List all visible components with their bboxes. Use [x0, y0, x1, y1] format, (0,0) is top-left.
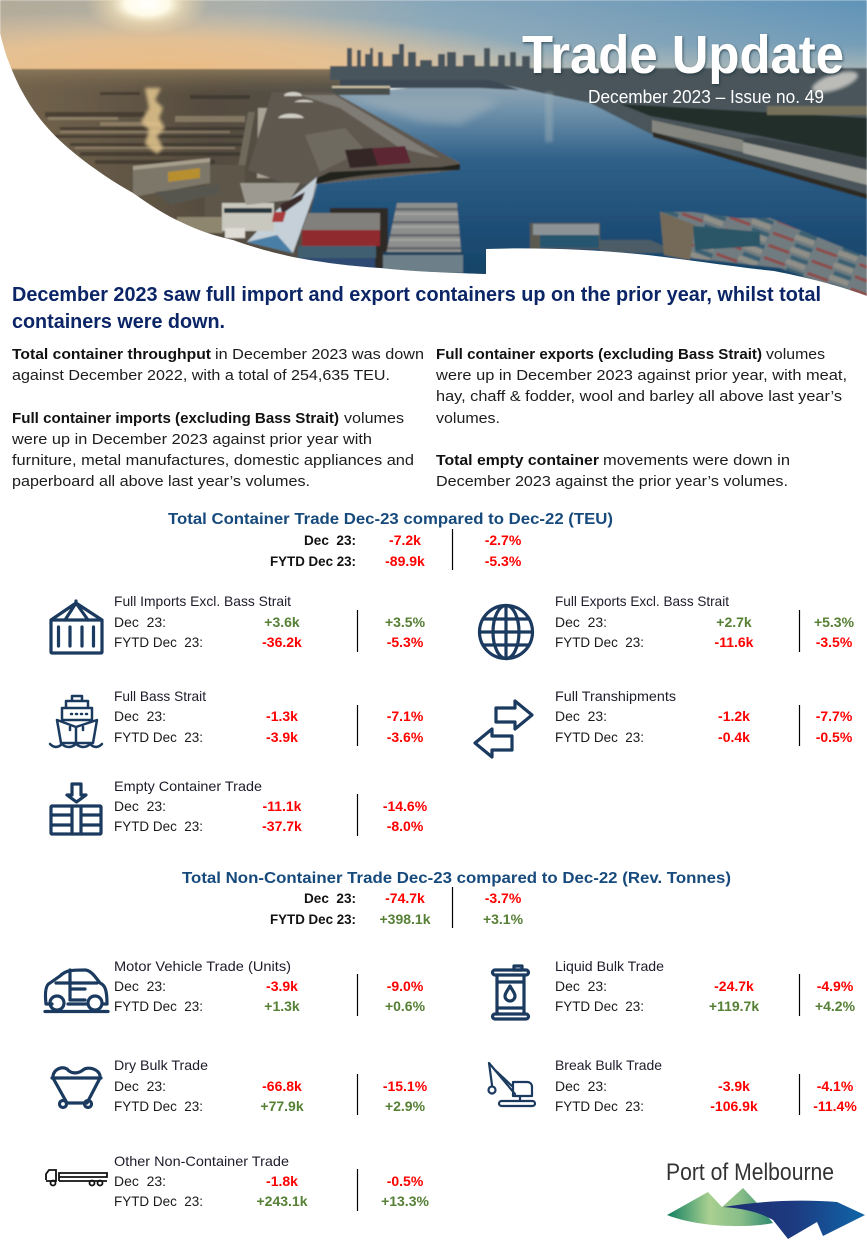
panel: motor vehicle trade: +0.6% [385, 998, 426, 1014]
total non-container trade summary: +398.1k [380, 911, 431, 927]
panel: full imports: Full Imports Excl. Bass Strait [114, 593, 291, 609]
main headline [12, 284, 821, 333]
panel: motor vehicle trade: FYTD Dec 23: [114, 998, 203, 1014]
main headline: containers were down. [12, 311, 225, 333]
section heading: total non-container trade: Total Non-Container Trade Dec-23 compared to Dec-22 (Rev. Tonnes) [182, 870, 731, 887]
panel: full exports: +5.3% [814, 614, 855, 630]
panel: break bulk trade: -3.9k [718, 1078, 750, 1094]
panel: dry bulk trade: Dry Bulk Trade [114, 1057, 208, 1073]
central pier [248, 92, 460, 185]
panel: full imports: FYTD Dec 23: [114, 634, 203, 650]
water [290, 84, 867, 300]
logo: Port of Melbourne [666, 1159, 865, 1239]
panel: motor vehicle trade: -3.9k [266, 978, 298, 994]
main headline: December 2023 saw full import and export containers up on the prior year, whilst total [12, 284, 821, 306]
icon: flatbed truck [46, 1170, 107, 1186]
red container stack [295, 208, 388, 270]
panel: liquid bulk trade: Liquid Bulk Trade [555, 958, 664, 974]
icon: two-way arrows [475, 701, 532, 757]
right container stacks [660, 212, 867, 300]
total container trade summary: Dec 23: [304, 533, 356, 548]
right bank [440, 67, 867, 200]
paragraph: full exports: volumes [766, 346, 825, 363]
panel: full Bass Strait: -1.3k [266, 708, 298, 724]
panel: dry bulk trade: +77.9k [260, 1098, 304, 1114]
icon: globe [480, 606, 532, 658]
panel: full imports: Dec 23: [114, 614, 166, 630]
panel: motor vehicle trade: Dec 23: [114, 978, 166, 994]
panel: full transhipments: -0.4k [718, 729, 750, 745]
panel: full Bass Strait: Dec 23: [114, 708, 166, 724]
paragraph: empty containers: Total empty container [436, 452, 599, 469]
paragraph: total throughput: in December 2023 was down [215, 346, 424, 363]
paragraph: full imports: were up in December 2023 against prior year with [11, 431, 372, 448]
paragraph: full exports: volumes. [436, 410, 500, 427]
panel: break bulk trade: -106.9k [710, 1098, 758, 1114]
panel: full transhipments: -7.7% [816, 708, 853, 724]
panel: dry bulk trade: Dec 23: [114, 1078, 166, 1094]
panel: full transhipments: -0.5% [816, 729, 853, 745]
sky [0, 0, 867, 70]
panel: empty container trade: -14.6% [383, 798, 428, 814]
panel: motor vehicle trade: Motor Vehicle Trade (Units) [114, 958, 291, 974]
total non-container trade summary: FYTD Dec 23: [270, 912, 356, 927]
panel: other non-container trade: +243.1k [256, 1193, 308, 1209]
panel: liquid bulk trade: FYTD Dec 23: [555, 998, 644, 1014]
panel: full exports: Full Exports Excl. Bass Strait [555, 593, 729, 609]
panel: empty container trade: -8.0% [387, 818, 424, 834]
total container trade summary: -2.7% [485, 532, 522, 548]
total container trade summary [270, 529, 522, 570]
total non-container trade summary: -74.7k [385, 890, 425, 906]
logo: Port of Melbourne: Port of Melbourne [666, 1159, 834, 1186]
total non-container trade summary: +3.1% [483, 911, 524, 927]
paragraph: full imports: Full container imports (excluding Bass Strait) [12, 410, 339, 427]
paragraph: empty containers: December 2023 against the prior year’s volumes. [436, 473, 788, 490]
panel: other non-container trade: Dec 23: [114, 1173, 166, 1189]
paragraph: full imports: volumes [344, 410, 404, 427]
total container trade summary: -7.2k [389, 532, 421, 548]
panel: full exports: +2.7k [716, 614, 752, 630]
panel: other non-container trade: +13.3% [381, 1193, 429, 1209]
panel: full Bass Strait: Full Bass Strait [114, 688, 206, 704]
panel: full exports: -3.5% [816, 634, 853, 650]
panel: full transhipments: FYTD Dec 23: [555, 729, 644, 745]
panel: full Bass Strait: -3.6% [387, 729, 424, 745]
panel: break bulk trade: Dec 23: [555, 1078, 607, 1094]
panel: full imports: -36.2k [262, 634, 302, 650]
total non-container trade summary: -3.7% [485, 890, 522, 906]
panel: full imports: -5.3% [387, 634, 424, 650]
panel: liquid bulk trade [492, 958, 856, 1019]
paragraph: full imports: furniture, metal manufactures, domestic appliances and [12, 452, 414, 469]
panel: break bulk trade: -11.4% [813, 1098, 857, 1114]
panel: break bulk trade [488, 1057, 857, 1115]
panel: full exports: FYTD Dec 23: [555, 634, 644, 650]
total container trade summary: FYTD Dec 23: [270, 554, 356, 569]
paragraph: full exports: were up in December 2023 against prior year, with meat, [435, 367, 847, 384]
panel: full transhipments [475, 688, 853, 757]
panel: break bulk trade: Break Bulk Trade [555, 1057, 662, 1073]
panel: full transhipments: Full Transhipments [555, 688, 676, 704]
panel: motor vehicle trade: -9.0% [387, 978, 424, 994]
panel: liquid bulk trade: Dec 23: [555, 978, 607, 994]
paragraph: total throughput: against December 2022, with a total of 254,635 TEU. [12, 367, 390, 384]
small Maersk stack [530, 223, 680, 253]
panel: full imports [51, 593, 426, 653]
panel: liquid bulk trade: +4.2% [815, 998, 856, 1014]
panel: other non-container trade: Other Non-Container Trade [114, 1153, 289, 1169]
panel: full transhipments: -1.2k [718, 708, 750, 724]
left text column [11, 346, 424, 490]
icon: ore cart [52, 1068, 101, 1108]
panel: dry bulk trade: -15.1% [383, 1078, 428, 1094]
paragraph: full exports: Full container exports (excluding Bass Strait) [436, 346, 762, 363]
icon: ship [50, 696, 102, 747]
warehouses [652, 120, 867, 199]
panel: dry bulk trade: FYTD Dec 23: [114, 1098, 203, 1114]
panel: other non-container trade: FYTD Dec 23: [114, 1193, 203, 1209]
icon: oil barrel [492, 966, 528, 1019]
panel: full exports [480, 593, 855, 658]
paragraph: full imports [11, 410, 414, 490]
total container trade summary: -89.9k [385, 553, 425, 569]
panel: empty container trade: Dec 23: [114, 798, 166, 814]
panel: full imports: +3.6k [264, 614, 300, 630]
icon: car [45, 970, 108, 1012]
paragraph: full exports [435, 346, 847, 427]
right text column [435, 346, 847, 490]
paragraph: empty containers: movements were down in [603, 452, 790, 469]
paragraph: full exports: hay, chaff & fodder, wool and barley all above last year’s [436, 388, 842, 405]
panel: other non-container trade: -0.5% [387, 1173, 424, 1189]
panel: dry bulk trade [52, 1057, 428, 1115]
icon: container with down arrow [51, 784, 101, 834]
panel: other non-container trade [46, 1153, 429, 1211]
panel: full exports: -11.6k [715, 634, 754, 650]
issue line: December 2023 – Issue no. 49 [588, 87, 824, 107]
panel: empty container trade [51, 778, 428, 836]
panel: dry bulk trade: -66.8k [262, 1078, 302, 1094]
paragraph: full imports: paperboard all above last year’s volumes. [12, 473, 310, 490]
paragraph: empty containers [436, 452, 790, 490]
panel: full transhipments: Dec 23: [555, 708, 607, 724]
paragraph: total throughput [12, 346, 424, 384]
panel: other non-container trade: -1.8k [266, 1173, 298, 1189]
tan warehouse [133, 158, 220, 205]
panel: full Bass Strait: FYTD Dec 23: [114, 729, 203, 745]
panel: empty container trade: -11.1k [263, 798, 302, 814]
icon: crane [488, 1063, 535, 1106]
ship [222, 177, 317, 253]
panel: empty container trade: FYTD Dec 23: [114, 818, 203, 834]
panel: motor vehicle trade: +1.3k [264, 998, 300, 1014]
panel: motor vehicle trade [45, 958, 426, 1016]
panel: full Bass Strait: -3.9k [266, 729, 298, 745]
total non-container trade summary [270, 887, 524, 928]
title: Trade Update: Trade Update [522, 25, 844, 85]
paragraph: total throughput: Total container throughput [12, 346, 211, 363]
skyline [330, 44, 530, 95]
panel: empty container trade: Empty Container Trade [114, 778, 262, 794]
grey container stack [382, 203, 463, 273]
sun [85, 0, 209, 36]
icon: shipping container [51, 601, 102, 653]
panel: break bulk trade: FYTD Dec 23: [555, 1098, 644, 1114]
panel: full Bass Strait [50, 688, 424, 747]
panel: break bulk trade: -4.1% [817, 1078, 854, 1094]
total non-container trade summary: Dec 23: [304, 891, 356, 906]
left dockland [0, 69, 350, 270]
panel: full Bass Strait: -7.1% [387, 708, 424, 724]
panel: liquid bulk trade: -24.7k [714, 978, 754, 994]
total container trade summary: -5.3% [485, 553, 522, 569]
panel: dry bulk trade: +2.9% [385, 1098, 426, 1114]
panel: full imports: +3.5% [385, 614, 426, 630]
panel: full exports: Dec 23: [555, 614, 607, 630]
panel: empty container trade: -37.7k [262, 818, 302, 834]
section heading: total container trade: Total Container Trade Dec-23 compared to Dec-22 (TEU) [168, 511, 613, 528]
panel: liquid bulk trade: +119.7k [709, 998, 759, 1014]
panel: liquid bulk trade: -4.9% [817, 978, 854, 994]
